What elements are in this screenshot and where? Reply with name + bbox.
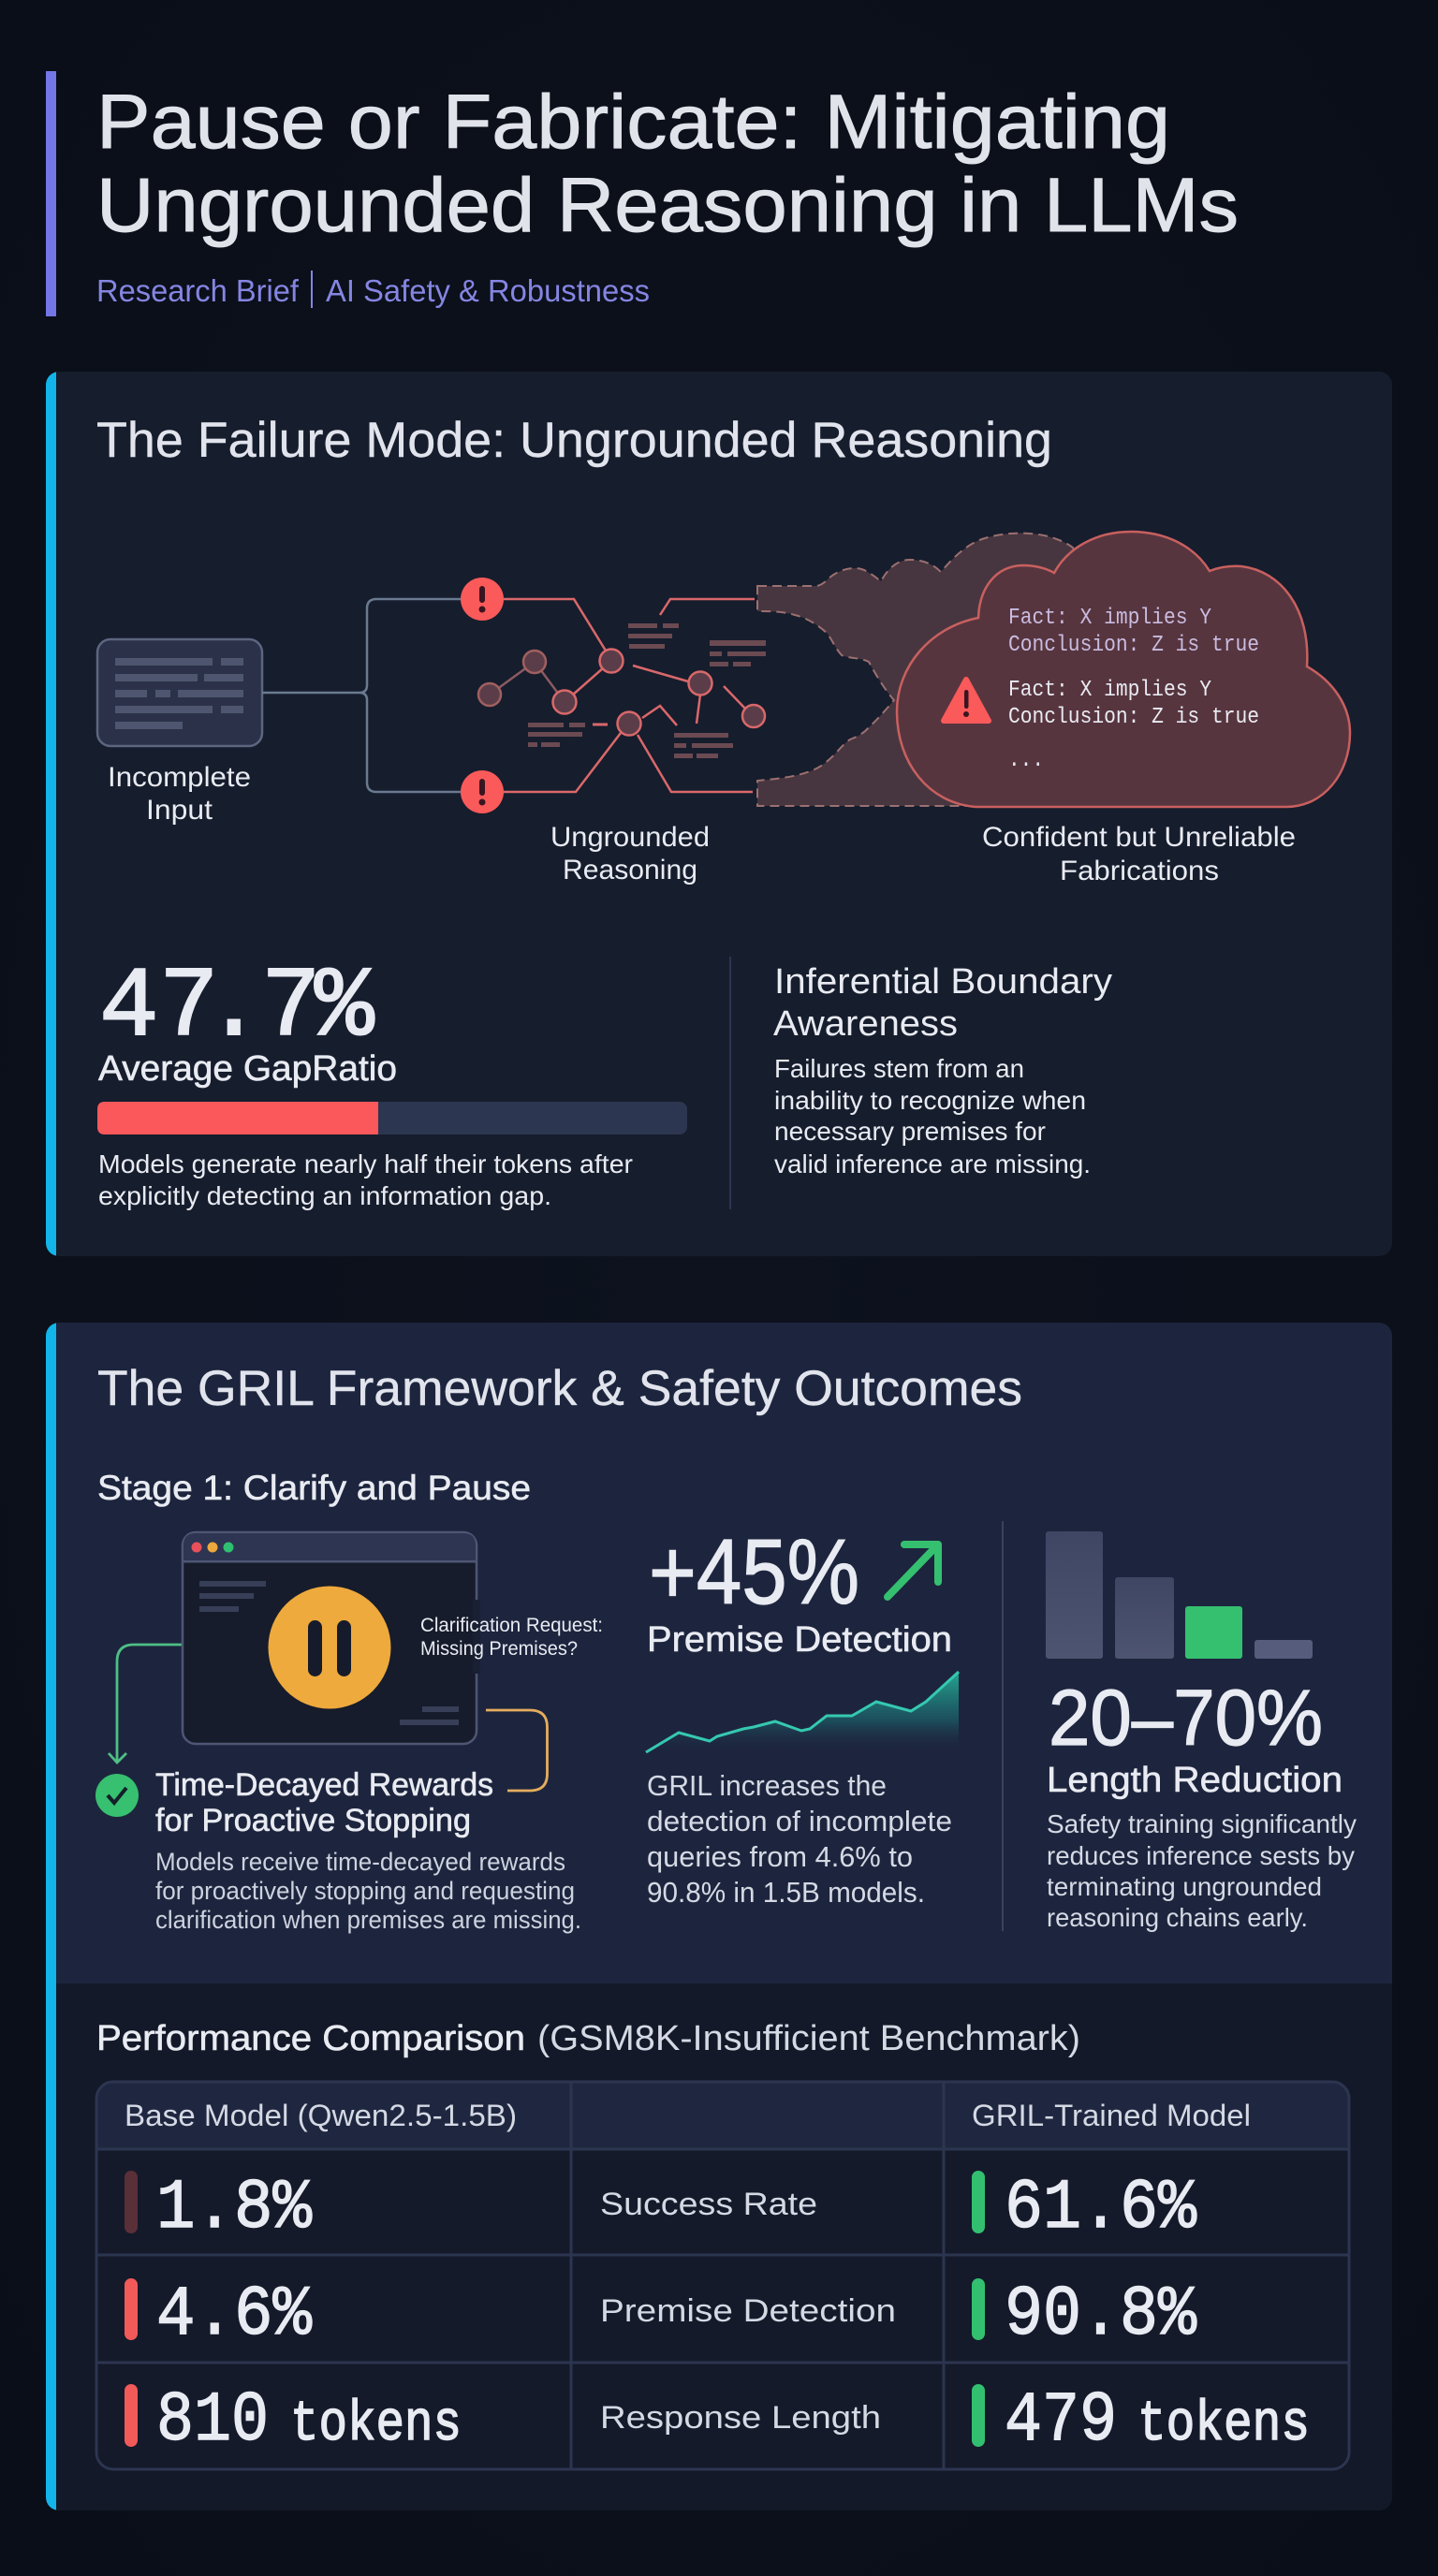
subtitle: AI Safety & Robustness bbox=[326, 273, 650, 308]
stat: average gap ratio bbox=[97, 952, 687, 1210]
connector: input branches bbox=[262, 599, 461, 792]
label: confident fabrications: Fabrications bbox=[1060, 856, 1219, 886]
text block: inferential boundary awareness: Failures stem from an bbox=[774, 1054, 1024, 1083]
icon: alert bottom bbox=[461, 770, 504, 813]
label: Length Reduction bbox=[1047, 1761, 1343, 1800]
text block: inferential boundary awareness: necessary premises for bbox=[774, 1117, 1046, 1146]
stat description: explicitly detecting an information gap. bbox=[98, 1181, 551, 1210]
text block: time-decayed rewards: for Proactive Stopping bbox=[155, 1803, 471, 1838]
row: response length: 810 bbox=[156, 2381, 269, 2461]
icon: alert top bbox=[461, 578, 504, 621]
row: response length: tokens bbox=[1137, 2393, 1310, 2457]
icon: up arrow bbox=[888, 1544, 938, 1597]
description bbox=[647, 1769, 952, 1909]
fabricated text lines bbox=[1008, 606, 1259, 773]
label: ungrounded reasoning bbox=[550, 822, 710, 886]
stat value: 47.7% bbox=[99, 952, 374, 1064]
connector: green arrow bbox=[109, 1645, 183, 1763]
text block: inferential boundary awareness: valid inference are missing. bbox=[774, 1149, 1091, 1178]
title: Pause or Fabricate: Mitigating bbox=[96, 80, 1170, 165]
text block: inferential boundary awareness: Inferential Boundary bbox=[774, 962, 1112, 1002]
subheading: stage 1: Stage 1: Clarify and Pause bbox=[97, 1469, 531, 1507]
row: success rate: Success Rate bbox=[600, 2187, 817, 2222]
description: queries from 4.6% to bbox=[647, 1840, 913, 1873]
fabricated text lines: ... bbox=[1008, 748, 1044, 773]
heading: performance comparison bbox=[96, 2019, 1080, 2058]
fabricated text lines: Conclusion: Z is true bbox=[1008, 705, 1259, 730]
label: ungrounded reasoning: Reasoning bbox=[563, 855, 697, 886]
title: Ungrounded Reasoning in LLMs bbox=[96, 163, 1239, 248]
row: response length: Response Length bbox=[600, 2400, 881, 2436]
bar chart bbox=[1046, 1531, 1313, 1659]
heading: failure mode: The Failure Mode: Ungrounded Reasoning bbox=[96, 413, 1052, 468]
fabricated text lines: Fact: X implies Y bbox=[1008, 606, 1211, 631]
label: confident fabrications: Confident but Unreliable bbox=[982, 822, 1296, 853]
value: +45%: +45% bbox=[649, 1520, 859, 1623]
subtitle: Research Brief bbox=[96, 273, 300, 308]
table header bbox=[125, 2099, 1251, 2132]
icon: green check bbox=[95, 1774, 139, 1817]
row: response length bbox=[125, 2381, 1310, 2461]
table header: GRIL-Trained Model bbox=[972, 2099, 1251, 2132]
fabricated text lines: Conclusion: Z is true bbox=[1008, 633, 1259, 658]
text block: inferential boundary awareness: inability to recognize when bbox=[774, 1086, 1086, 1115]
fabricated text lines: Fact: X implies Y bbox=[1008, 678, 1211, 703]
text block: time-decayed rewards: clarification when premises are missing. bbox=[155, 1906, 581, 1934]
label: incomplete input bbox=[108, 762, 251, 826]
stat: length reduction bbox=[1046, 1531, 1357, 1932]
description: detection of incomplete bbox=[647, 1805, 952, 1837]
diagram: incomplete input bbox=[97, 639, 262, 746]
label: confident fabrications bbox=[982, 822, 1296, 886]
description: reduces inference sests by bbox=[1047, 1841, 1355, 1870]
icon: pause bbox=[268, 1586, 391, 1709]
description: GRIL increases the bbox=[647, 1769, 887, 1802]
sparkline chart bbox=[646, 1672, 959, 1752]
row: success rate: 61.6% bbox=[1005, 2169, 1197, 2248]
icon: warning triangle bbox=[944, 680, 989, 721]
progress bar bbox=[97, 1102, 687, 1134]
heading: performance comparison: Performance Comparison bbox=[96, 2019, 525, 2058]
text block: time-decayed rewards: Models receive time-decayed rewards bbox=[155, 1848, 565, 1876]
subtitle bbox=[96, 271, 650, 308]
title bbox=[96, 80, 1239, 248]
panel: failure mode bbox=[46, 372, 1392, 1256]
text block: inferential boundary awareness: Awareness bbox=[773, 1004, 958, 1044]
row: premise detection: 4.6% bbox=[156, 2276, 313, 2355]
description: terminating ungrounded bbox=[1047, 1872, 1322, 1901]
description bbox=[1047, 1809, 1357, 1932]
comparison table bbox=[96, 2082, 1349, 2469]
heading: GRIL framework: The GRIL Framework & Safety Outcomes bbox=[97, 1361, 1022, 1416]
shape: fabrications cloud bbox=[897, 532, 1350, 807]
row: response length: tokens bbox=[290, 2393, 462, 2457]
label: incomplete input: Input bbox=[146, 795, 213, 826]
panel: GRIL framework bbox=[46, 1323, 1392, 2510]
description: Safety training significantly bbox=[1047, 1809, 1357, 1838]
header accent bar bbox=[46, 71, 56, 316]
text block: time-decayed rewards: for proactively stopping and requesting bbox=[155, 1877, 575, 1905]
heading: performance comparison: (GSM8K-Insufficient Benchmark) bbox=[537, 2019, 1080, 2058]
text block: time-decayed rewards bbox=[155, 1767, 581, 1934]
diagram: reasoning graph bbox=[478, 599, 766, 792]
row: premise detection: 90.8% bbox=[1005, 2276, 1197, 2355]
row: premise detection bbox=[125, 2276, 1197, 2355]
callout: clarification request: Clarification Request: bbox=[420, 1615, 603, 1636]
label: Premise Detection bbox=[647, 1620, 952, 1660]
text block: time-decayed rewards: Time-Decayed Rewards bbox=[155, 1767, 493, 1803]
connector: orange bracket bbox=[486, 1710, 547, 1791]
callout: clarification request bbox=[420, 1600, 603, 1674]
label: incomplete input: Incomplete bbox=[108, 762, 251, 793]
value: 20-70%: 20–70% bbox=[1049, 1674, 1323, 1762]
illustration: paused window bbox=[183, 1532, 603, 1744]
label: ungrounded reasoning: Ungrounded bbox=[550, 822, 710, 853]
description: reasoning chains early. bbox=[1047, 1903, 1308, 1932]
stat description: Models generate nearly half their tokens after bbox=[98, 1149, 633, 1178]
row: premise detection: Premise Detection bbox=[600, 2293, 896, 2329]
header bbox=[46, 71, 1239, 316]
shape: dashed back cloud bbox=[757, 534, 1123, 806]
table header: Base Model (Qwen2.5-1.5B) bbox=[125, 2099, 517, 2132]
row: success rate: 1.8% bbox=[156, 2169, 313, 2248]
stat: premise detection bbox=[646, 1520, 959, 1909]
description: 90.8% in 1.5B models. bbox=[647, 1876, 925, 1909]
stat description bbox=[98, 1149, 633, 1210]
text block: inferential boundary awareness bbox=[773, 962, 1112, 1178]
stat label: Average GapRatio bbox=[98, 1049, 397, 1089]
row: success rate bbox=[125, 2169, 1197, 2248]
row: response length: 479 bbox=[1005, 2381, 1117, 2461]
callout: clarification request: Missing Premises? bbox=[420, 1638, 578, 1660]
